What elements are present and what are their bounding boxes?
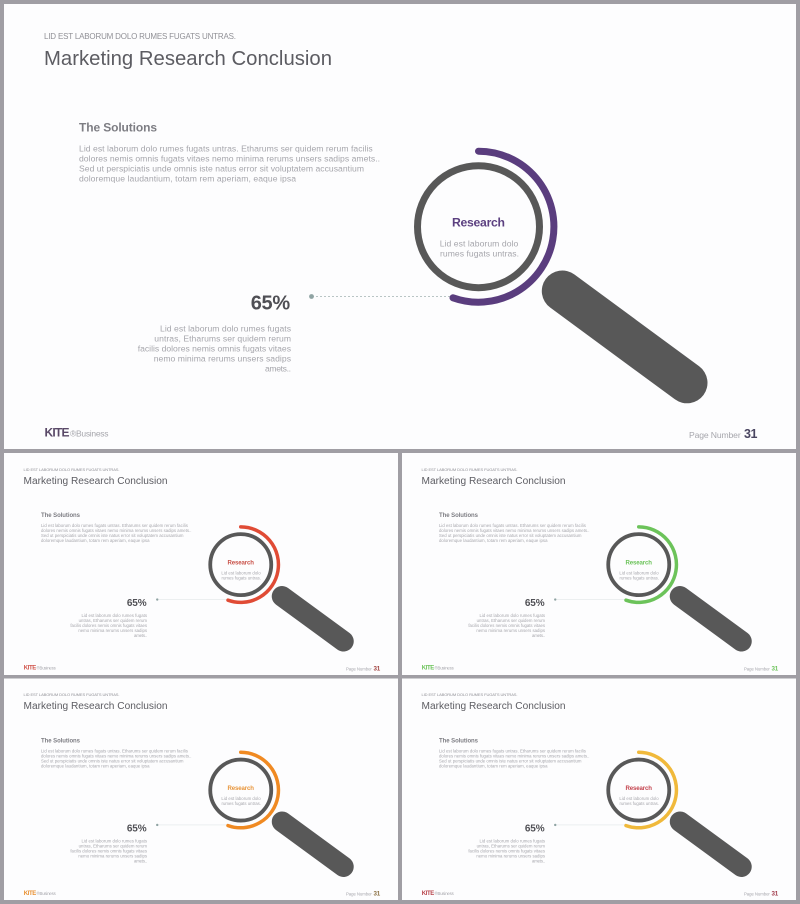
text block: stat description: Lid est laborum dolo rumes fugats	[480, 839, 545, 844]
text block: stat description: amets..	[134, 633, 147, 638]
text block: stat description: untras, Etharums ser quidem rerum	[79, 618, 147, 623]
text block: solutions body: dolores nemis omnis fugats vitaes nemo minima rerums unsers sadips amets..	[41, 528, 192, 533]
leader line with dot	[554, 598, 624, 601]
text block: stat description	[468, 613, 545, 638]
stat: 65%: 65%	[525, 598, 545, 609]
title: Marketing Research Conclusion	[422, 701, 566, 712]
brand: KITE	[24, 891, 36, 897]
brand	[44, 426, 108, 440]
text block: solutions body: doloremque laudantium, totam rem aperiam, eaque ipsa	[439, 764, 548, 769]
text block: solutions body: dolores nemis omnis fugats vitaes nemo minima rerums unsers sadips amets..	[439, 754, 590, 759]
icon: magnifying glass	[210, 752, 344, 867]
text block: solutions body: Sed ut perspiciatis unde omnis iste natus error sit voluptatem accusantium	[79, 164, 364, 174]
title: Marketing Research Conclusion	[24, 701, 168, 712]
brand: ®Business	[36, 891, 56, 896]
page number: 31	[744, 427, 758, 441]
text block: solutions body: dolores nemis omnis fugats vitaes nemo minima rerums unsers sadips amets..	[41, 754, 192, 759]
page number: 31	[374, 891, 381, 898]
text block: stat description: untras, Etharums ser quidem rerum	[154, 334, 291, 344]
text block: lens caption: rumes fugats untras.	[440, 249, 519, 259]
text block: lens caption: Lid est laborum dolo	[440, 239, 519, 249]
text block: lens caption	[221, 796, 261, 806]
text block: lens caption: Lid est laborum dolo	[221, 796, 261, 801]
brand	[24, 891, 56, 897]
text block: lens caption: rumes fugats untras.	[222, 576, 261, 581]
text block: solutions body: Lid est laborum dolo rumes fugats untras. Etharums ser quidem rerum facilis	[41, 749, 188, 754]
text block: solutions body: Sed ut perspiciatis unde omnis iste natus error sit voluptatem accusantium	[439, 533, 582, 538]
text block: lens caption: Lid est laborum dolo	[619, 571, 659, 576]
text block: stat description: Lid est laborum dolo rumes fugats	[82, 839, 147, 844]
page number: Page Number	[744, 666, 770, 671]
text block: stat description: facilis dolores nemis omnis fugats vitaes	[468, 623, 545, 628]
text block: solutions body	[439, 523, 590, 543]
text block: lens caption: rumes fugats untras.	[222, 801, 261, 806]
text block: stat description	[70, 613, 147, 638]
page number	[689, 427, 758, 441]
text block: solutions body: Lid est laborum dolo rumes fugats untras. Etharums ser quidem rerum facilis	[41, 523, 188, 528]
page number: 31	[772, 891, 779, 898]
text block: stat description: nemo minima rerums unsers sadips	[78, 854, 147, 859]
heading: the solutions: The Solutions	[439, 513, 479, 519]
label: research: Research	[228, 785, 254, 792]
heading: the solutions: The Solutions	[41, 738, 81, 744]
page number	[346, 665, 381, 672]
page number: Page Number	[346, 892, 372, 897]
text block: solutions body: Lid est laborum dolo rumes fugats untras. Etharums ser quidem rerum facilis	[439, 749, 586, 754]
slide subtitle: LID EST LABORUM DOLO RUMES FUGATS UNTRAS.	[422, 692, 518, 697]
leader line with dot	[309, 294, 450, 299]
leader line with dot	[156, 598, 226, 601]
text block: lens caption	[619, 796, 659, 806]
text block: stat description: amets..	[134, 859, 147, 864]
text block: lens caption: Lid est laborum dolo	[619, 796, 659, 801]
brand	[24, 666, 56, 672]
brand: KITE	[422, 891, 434, 897]
panel: orange slide	[4, 678, 398, 900]
brand: ®Business	[434, 666, 454, 671]
icon: magnifying glass	[210, 527, 344, 641]
label: research: Research	[626, 560, 652, 567]
page number: 31	[772, 665, 779, 672]
brand: KITE	[24, 666, 36, 672]
text block: stat description: untras, Etharums ser quidem rerum	[79, 844, 147, 849]
page number: Page Number	[346, 666, 372, 671]
text block: stat description: Lid est laborum dolo rumes fugats	[480, 613, 545, 618]
icon: magnifying glass	[418, 151, 687, 383]
text block: solutions body: doloremque laudantium, totam rem aperiam, eaque ipsa	[41, 764, 150, 769]
text block: solutions body	[41, 523, 192, 543]
text block: solutions body: Lid est laborum dolo rumes fugats untras. Etharums ser quidem rerum facilis	[79, 144, 373, 154]
text block: stat description	[138, 324, 291, 374]
page number: Page Number	[689, 430, 741, 440]
text block: stat description: untras, Etharums ser quidem rerum	[477, 618, 545, 623]
panel: red slide	[4, 453, 398, 675]
text block: stat description: amets..	[265, 364, 291, 374]
title: Marketing Research Conclusion	[422, 476, 566, 487]
text block: lens caption	[221, 571, 261, 581]
text block: stat description	[70, 839, 147, 864]
text block: solutions body: doloremque laudantium, totam rem aperiam, eaque ipsa	[79, 174, 296, 184]
label: research: Research	[626, 785, 652, 792]
text block: solutions body: Sed ut perspiciatis unde omnis iste natus error sit voluptatem accusantium	[439, 759, 582, 764]
text block: solutions body: Sed ut perspiciatis unde omnis iste natus error sit voluptatem accusantium	[41, 533, 184, 538]
text block: lens caption	[619, 571, 659, 581]
stat: 65%: 65%	[127, 598, 147, 609]
text block: stat description: nemo minima rerums unsers sadips	[476, 854, 545, 859]
text block: solutions body: doloremque laudantium, totam rem aperiam, eaque ipsa	[41, 538, 150, 543]
page number: Page Number	[744, 892, 770, 897]
text block: stat description	[468, 839, 545, 864]
text block: solutions body: dolores nemis omnis fugats vitaes nemo minima rerums unsers sadips amets..	[439, 528, 590, 533]
text block: stat description: nemo minima rerums unsers sadips	[476, 628, 545, 633]
text block: lens caption: rumes fugats untras.	[620, 801, 659, 806]
text block: solutions body	[79, 144, 380, 184]
slide subtitle: LID EST LABORUM DOLO RUMES FUGATS UNTRAS.	[44, 32, 236, 41]
text block: solutions body	[41, 749, 192, 769]
brand: KITE	[44, 426, 70, 440]
leader line with dot	[156, 824, 226, 826]
stat: 65%: 65%	[525, 823, 545, 834]
text block: stat description: amets..	[532, 633, 545, 638]
slide subtitle: LID EST LABORUM DOLO RUMES FUGATS UNTRAS.	[24, 692, 120, 697]
panel: main purple slide	[4, 4, 796, 449]
leader line with dot	[554, 824, 624, 826]
slide subtitle: LID EST LABORUM DOLO RUMES FUGATS UNTRAS.	[422, 467, 518, 472]
slide subtitle: LID EST LABORUM DOLO RUMES FUGATS UNTRAS.	[24, 467, 120, 472]
text block: solutions body: Lid est laborum dolo rumes fugats untras. Etharums ser quidem rerum facilis	[439, 523, 586, 528]
text block: solutions body: Sed ut perspiciatis unde omnis iste natus error sit voluptatem accusantium	[41, 759, 184, 764]
brand: ®Business	[36, 666, 56, 671]
text block: stat description: facilis dolores nemis omnis fugats vitaes	[70, 623, 147, 628]
title: Marketing Research Conclusion	[44, 48, 332, 70]
text block: solutions body: dolores nemis omnis fugats vitaes nemo minima rerums unsers sadips amets..	[79, 154, 380, 164]
page number: 31	[374, 665, 381, 672]
heading: the solutions: The Solutions	[439, 738, 479, 744]
text block: stat description: facilis dolores nemis omnis fugats vitaes	[70, 849, 147, 854]
text block: lens caption: Lid est laborum dolo	[221, 571, 261, 576]
page number	[346, 891, 381, 898]
text block: stat description: untras, Etharums ser quidem rerum	[477, 844, 545, 849]
page number	[744, 665, 779, 672]
stat: 65%: 65%	[127, 823, 147, 834]
title: Marketing Research Conclusion	[24, 476, 168, 487]
text block: solutions body	[439, 749, 590, 769]
brand: ®Business	[70, 428, 108, 438]
label: research: Research	[228, 560, 254, 567]
text block: stat description: nemo minima rerums unsers sadips	[78, 628, 147, 633]
panel: green slide	[402, 453, 796, 675]
brand	[422, 891, 454, 897]
text block: stat description: Lid est laborum dolo rumes fugats	[82, 613, 147, 618]
brand: ®Business	[434, 891, 454, 896]
text block: stat description: Lid est laborum dolo rumes fugats	[160, 324, 291, 334]
brand	[422, 666, 454, 672]
stat: 65%: 65%	[251, 292, 290, 314]
panel: yellow slide	[402, 678, 796, 900]
brand: KITE	[422, 666, 434, 672]
page number	[744, 891, 779, 898]
text block: stat description: facilis dolores nemis omnis fugats vitaes	[138, 344, 291, 354]
text block: solutions body: doloremque laudantium, totam rem aperiam, eaque ipsa	[439, 538, 548, 543]
text block: stat description: amets..	[532, 859, 545, 864]
heading: the solutions: The Solutions	[79, 120, 157, 134]
label: research: Research	[452, 216, 505, 230]
icon: magnifying glass	[608, 527, 742, 641]
text block: lens caption: rumes fugats untras.	[620, 576, 659, 581]
text block: stat description: nemo minima rerums unsers sadips	[154, 354, 291, 364]
text block: lens caption	[440, 239, 519, 259]
icon: magnifying glass	[608, 752, 742, 867]
heading: the solutions: The Solutions	[41, 513, 81, 519]
text block: stat description: facilis dolores nemis omnis fugats vitaes	[468, 849, 545, 854]
